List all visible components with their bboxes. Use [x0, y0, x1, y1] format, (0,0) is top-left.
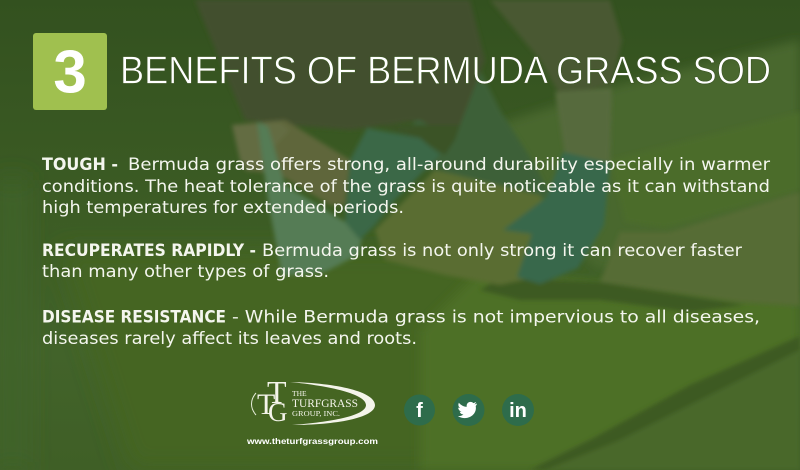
paragraph: tough: Bermuda grass offers strong, all-around durability especially in warmer — [128, 155, 770, 175]
number 3: 3 — [53, 38, 87, 106]
icon: facebook — [404, 394, 435, 426]
website url: www.theturfgrassgroup.com — [246, 436, 378, 446]
logo: The Turfgrass Group: G — [268, 397, 288, 427]
gloves — [345, 128, 440, 240]
paragraph: tough — [42, 155, 770, 218]
paragraph: tough: high temperatures for extended periods. — [42, 198, 404, 218]
logo: The Turfgrass Group: T — [257, 388, 275, 421]
logo: The Turfgrass Group: TURFGRASS — [292, 398, 358, 410]
paragraph: tough: TOUGH - — [42, 155, 118, 175]
icon: linkedin: in — [509, 400, 527, 422]
sod roll — [375, 170, 570, 285]
number badge — [33, 33, 107, 110]
paragraph: disease resistance: diseases rarely affect its leaves and roots. — [42, 329, 417, 349]
logo: The Turfgrass Group: GROUP, INC. — [292, 409, 340, 418]
paragraph: recuperates rapidly: than many other types of grass. — [42, 262, 329, 282]
paragraph: disease resistance: DISEASE RESISTANCE — [42, 308, 226, 328]
arms — [232, 120, 350, 205]
paragraph: disease resistance: - While Bermuda grass is not impervious to all diseases, — [232, 308, 760, 328]
paragraph: tough: conditions. The heat tolerance of the grass is quite noticeable as it can withstand — [42, 177, 770, 197]
paragraph: disease resistance — [42, 308, 760, 349]
paragraph: recuperates rapidly: RECUPERATES RAPIDLY - — [42, 241, 256, 261]
icon: facebook: f — [416, 400, 423, 422]
logo: The Turfgrass Group: T — [267, 374, 287, 410]
icon: linkedin — [502, 394, 534, 426]
jeans and shirt — [400, 40, 550, 210]
paragraph: recuperates rapidly: Bermuda grass is not only strong it can recover faster — [262, 241, 742, 261]
paragraph: recuperates rapidly — [42, 241, 742, 282]
title: BENEFITS OF BERMUDA GRASS SOD — [120, 50, 771, 92]
logo: The Turfgrass Group: THE — [292, 389, 307, 398]
icon: twitter — [452, 394, 484, 426]
knee — [257, 122, 362, 276]
logo: The Turfgrass Group — [252, 374, 375, 427]
